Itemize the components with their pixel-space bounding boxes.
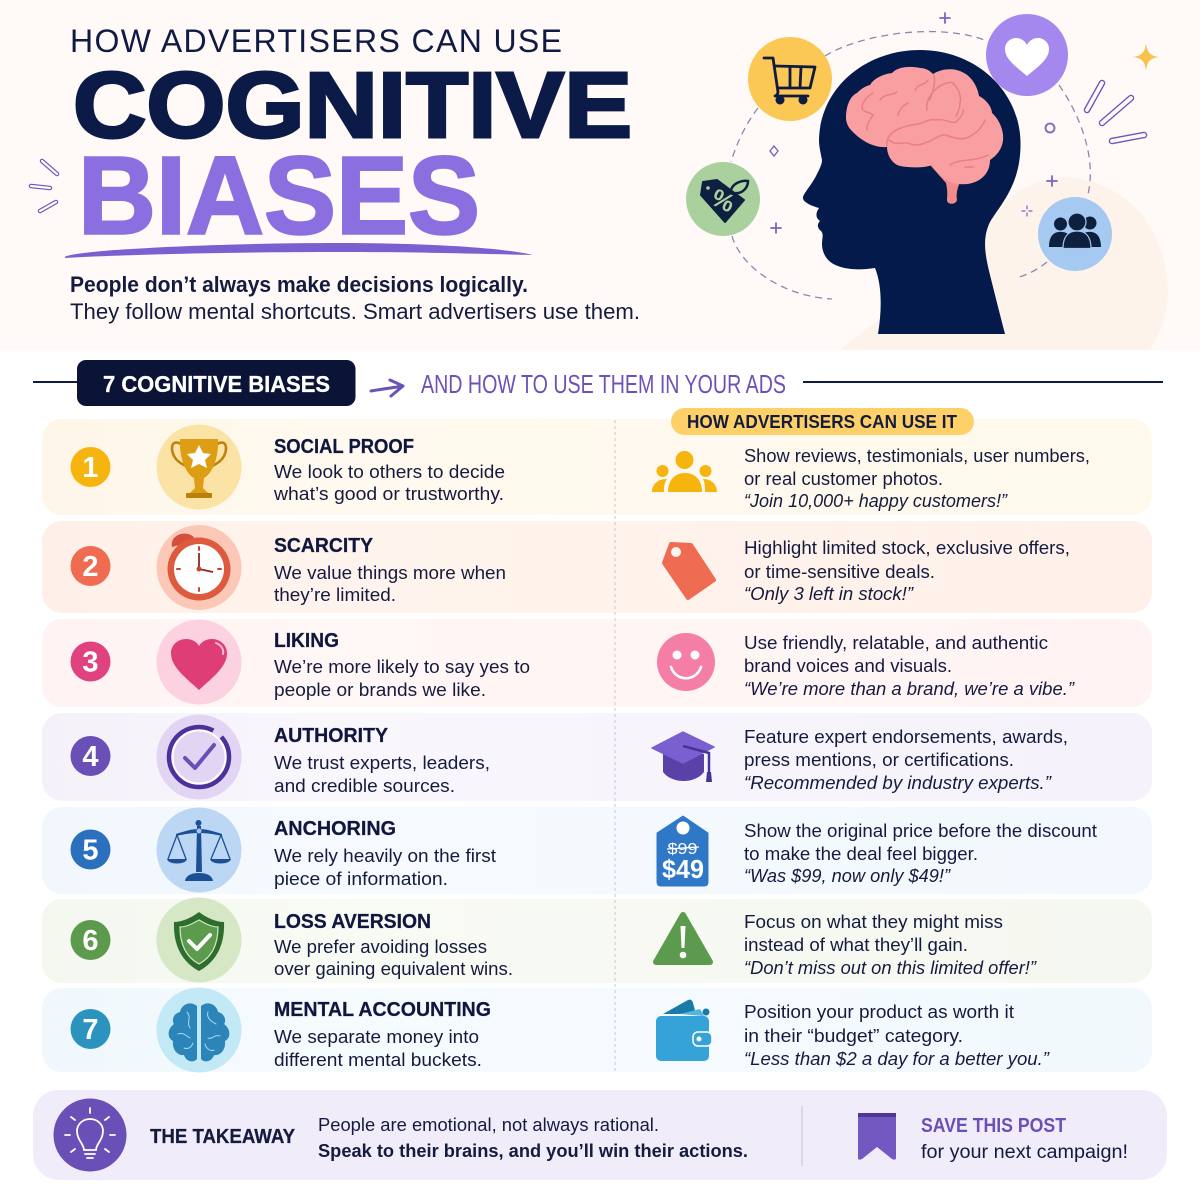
how to use text: Feature expert endorsements, awards, — [744, 726, 1068, 747]
number badge 6: 6 — [82, 925, 99, 957]
head silhouette — [803, 50, 1021, 334]
how to use text: instead of what they’ll gain. — [744, 934, 968, 955]
dashed orbit — [731, 32, 1090, 299]
row 7: mental accounting — [70, 988, 1050, 1072]
number badge 4: 4 — [82, 741, 99, 773]
bias text: what’s good or trustworthy. — [273, 483, 504, 504]
how to use text: brand voices and visuals. — [744, 655, 952, 676]
bias text: they’re limited. — [274, 584, 396, 605]
bias text: AUTHORITY — [274, 725, 389, 747]
how to use text — [744, 445, 1090, 511]
how to use text: Show the original price before the discount — [744, 820, 1097, 841]
how to use text: “Recommended by industry experts.” — [744, 772, 1052, 793]
icon: discount tag — [686, 162, 760, 236]
title: biases: BIASES — [78, 134, 480, 258]
bias text: We prefer avoiding losses — [274, 936, 487, 957]
bias text: people or brands we like. — [274, 679, 486, 700]
row 3: liking — [70, 620, 1075, 704]
bias text: over gaining equivalent wins. — [274, 958, 513, 979]
how to use text: “Only 3 left in stock!” — [744, 583, 914, 604]
subtitle: bold line: People don’t always make decisions logically. — [70, 272, 528, 297]
icon: clock — [156, 525, 242, 610]
how to use text: or time-sensitive deals. — [744, 561, 935, 582]
section header — [33, 360, 1163, 406]
save call to action: SAVE THIS POST — [921, 1115, 1066, 1137]
bias text — [274, 911, 513, 979]
icon: bookmark — [858, 1113, 896, 1160]
bias text — [274, 535, 506, 605]
icon: graduation cap — [652, 732, 714, 782]
icon: shopping cart — [748, 37, 832, 121]
icon: discount price tag: $99 — [668, 841, 698, 858]
how to use text — [744, 726, 1068, 793]
handwritten subheading: AND HOW TO USE THEM IN YOUR ADS — [421, 369, 786, 399]
bias text: We value things more when — [274, 562, 506, 583]
number badge 6 — [70, 920, 110, 960]
hero illustration — [686, 13, 1159, 334]
brush underline — [65, 243, 533, 258]
icon: discount price tag — [657, 816, 708, 886]
icon: check circle — [156, 714, 242, 800]
number badge 1: 1 — [82, 452, 99, 484]
bias text: different mental buckets. — [274, 1049, 482, 1070]
bias text: piece of information. — [274, 868, 448, 889]
how to use text: “We’re more than a brand, we’re a vibe.” — [744, 678, 1075, 699]
how to use text: or real customer photos. — [744, 468, 943, 489]
row backgrounds — [42, 419, 1152, 1072]
how to use text: Highlight limited stock, exclusive offers, — [744, 537, 1070, 558]
icon: scales — [156, 808, 242, 892]
bias text: ANCHORING — [274, 818, 396, 840]
takeaway label: THE TAKEAWAY — [150, 1126, 296, 1148]
row 2: scarcity — [70, 525, 1070, 610]
bias text: SCARCITY — [274, 535, 374, 557]
save call to action: for your next campaign! — [921, 1142, 1128, 1163]
header background — [0, 0, 1200, 350]
number badge 3: 3 — [82, 646, 99, 678]
bias text — [274, 725, 490, 796]
number badge 7 — [70, 1009, 110, 1049]
accent rays — [1087, 83, 1144, 141]
icon: warning triangle — [656, 915, 710, 962]
how to use text: in their “budget” category. — [744, 1025, 963, 1046]
how to use text — [744, 911, 1037, 978]
how to use text — [744, 820, 1097, 886]
bias text: MENTAL ACCOUNTING — [274, 999, 491, 1021]
how to use text — [744, 537, 1070, 604]
how to use text: “Less than $2 a day for a better you.” — [744, 1048, 1050, 1069]
icon: heart badge — [986, 14, 1068, 96]
bias text: We separate money into — [274, 1026, 479, 1047]
title — [70, 23, 632, 258]
row 1: social proof — [70, 424, 1090, 511]
how to use text: Position your product as worth it — [744, 1001, 1014, 1022]
bias text: LIKING — [274, 630, 339, 652]
how to use text — [744, 632, 1075, 699]
icon: people badge — [1038, 197, 1112, 271]
icon: gold sparkle — [1133, 43, 1159, 71]
bias text: We look to others to decide — [274, 461, 505, 482]
how to use text: “Don’t miss out on this limited offer!” — [744, 957, 1037, 978]
icon: trophy — [156, 424, 242, 510]
how to use text: Use friendly, relatable, and authentic — [744, 632, 1048, 653]
icon: left accent rays — [31, 161, 57, 211]
pill: 7 cognitive biases — [77, 360, 356, 406]
bias text — [274, 630, 530, 700]
arrow — [371, 380, 403, 396]
bias text — [273, 436, 505, 504]
icon: discount price tag: $49 — [662, 854, 704, 884]
bias text — [274, 818, 496, 889]
icon: blue brain — [156, 988, 242, 1072]
number badge 1 — [70, 447, 110, 487]
number badge 2 — [70, 546, 110, 586]
how to use text: Focus on what they might miss — [744, 911, 1003, 932]
how to use text: “Join 10,000+ happy customers!” — [744, 490, 1008, 511]
title: cognitive: COGNITIVE — [73, 53, 632, 157]
panel: takeaway — [33, 1090, 1167, 1180]
number badge 5 — [70, 830, 110, 870]
how to use text: to make the deal feel bigger. — [744, 843, 978, 864]
icon: smiley — [657, 633, 715, 691]
icon: people group — [652, 451, 717, 492]
how to use text: “Was $99, now only $49!” — [744, 865, 951, 886]
row 6: loss aversion — [70, 898, 1037, 982]
bias text: We trust experts, leaders, — [274, 752, 490, 773]
subtitle: regular line: They follow mental shortcuts. Smart advertisers use them. — [70, 299, 640, 324]
icon: discount tag: % — [707, 184, 739, 218]
how to use text — [744, 1001, 1050, 1069]
how to use text: press mentions, or certifications. — [744, 749, 1014, 770]
decorative marks — [770, 13, 1057, 233]
row 4: authority — [70, 714, 1068, 800]
number badge 2: 2 — [82, 551, 99, 583]
how to use text: Show reviews, testimonials, user numbers, — [744, 445, 1090, 466]
bias text: and credible sources. — [274, 775, 455, 796]
icon: light bulb — [54, 1098, 126, 1172]
takeaway message: Speak to their brains, and you’ll win their actions. — [318, 1140, 748, 1161]
takeaway message: People are emotional, not always rational. — [318, 1114, 659, 1135]
takeaway message — [318, 1114, 748, 1161]
number badge 4 — [70, 736, 110, 776]
brain — [846, 67, 1003, 204]
subtitle — [70, 272, 640, 324]
icon: shield — [156, 898, 242, 982]
column label pill — [671, 408, 974, 435]
icon: heart — [156, 620, 242, 704]
pill: 7 cognitive biases: 7 COGNITIVE BIASES — [103, 371, 330, 397]
bias text: SOCIAL PROOF — [274, 436, 414, 458]
number badge 3 — [70, 642, 110, 682]
bias text — [274, 999, 491, 1070]
bias text: We’re more likely to say yes to — [274, 656, 530, 677]
title: kicker: HOW ADVERTISERS CAN USE — [70, 23, 562, 59]
icon: wallet — [656, 1000, 712, 1061]
save call to action — [921, 1115, 1128, 1163]
icon: price tag — [664, 544, 714, 598]
row 5: anchoring — [70, 808, 1097, 892]
column label pill: HOW ADVERTISERS CAN USE IT — [687, 412, 957, 432]
bias text: We rely heavily on the first — [274, 845, 496, 866]
number badge 5: 5 — [82, 834, 99, 866]
bias text: LOSS AVERSION — [274, 911, 431, 933]
number badge 7: 7 — [82, 1014, 99, 1046]
